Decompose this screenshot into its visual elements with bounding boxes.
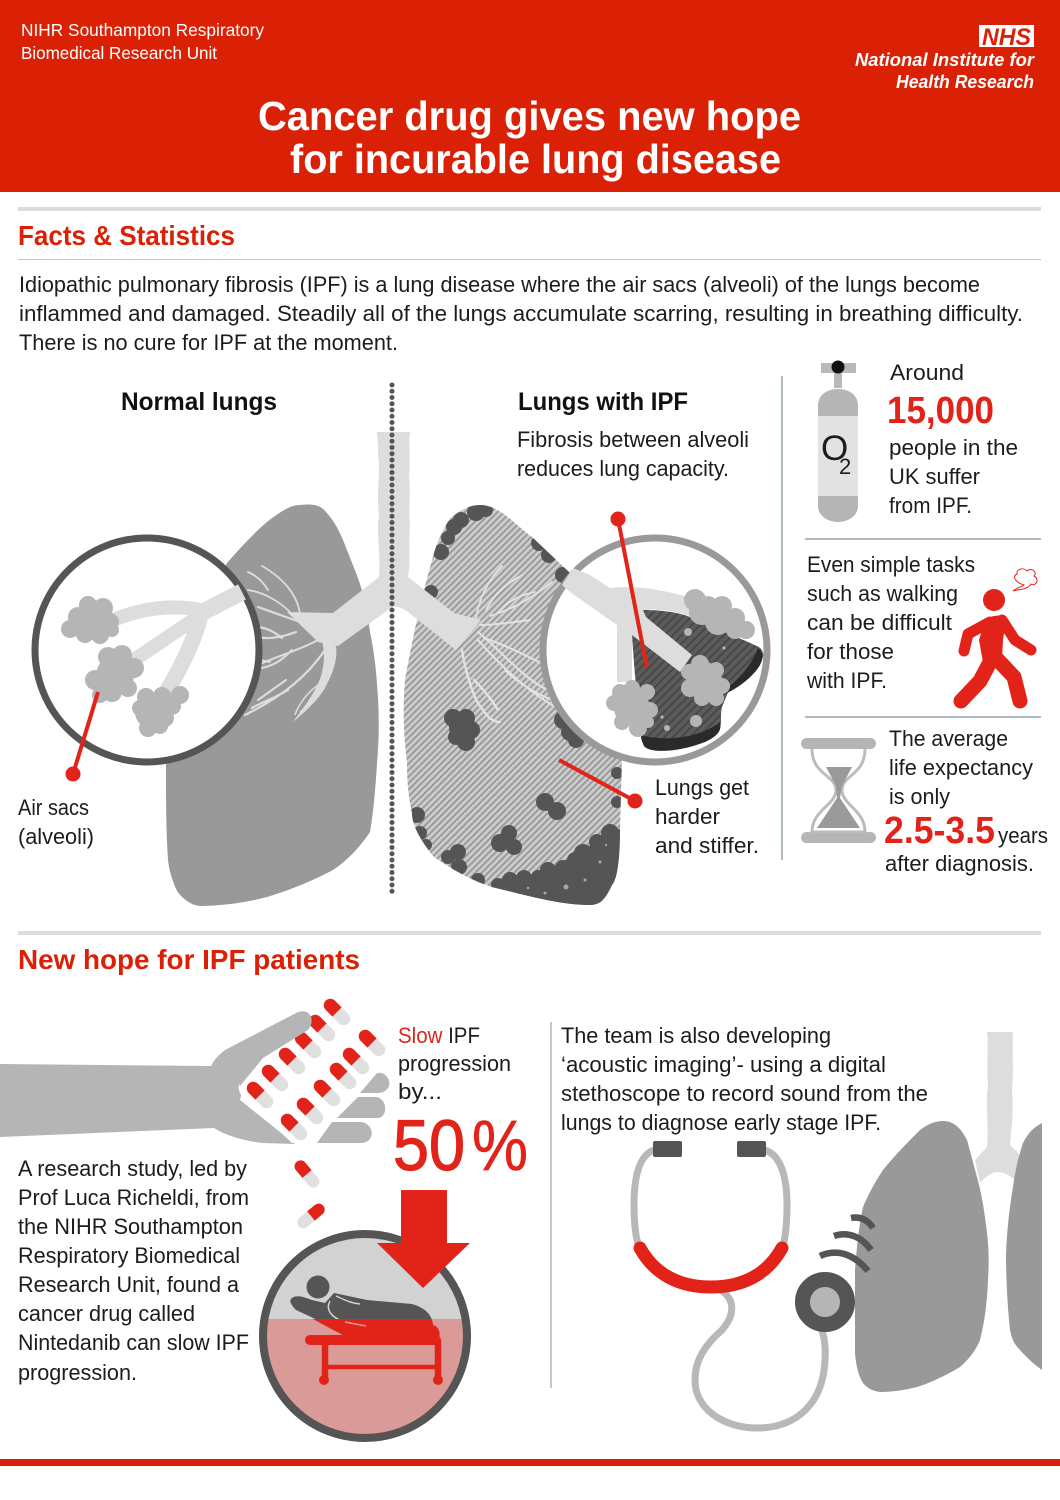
heading: facts and statistics: Facts & Statistics [18,220,235,251]
fine airways [462,566,565,722]
stat: life expectancy: years [998,823,1048,848]
stat: walking difficulty: such as walking [807,581,958,606]
intro text: Idiopathic pulmonary fibrosis (IPF) is a lung disease where the air sacs (alveoli) of the lungs become [19,272,980,297]
stat: life expectancy: is only [889,784,950,809]
intro text: inflammed and damaged. Steadily all of the lungs accumulate scarring, resulting in breathing difficulty. [19,301,1023,326]
text: research study: Respiratory Biomedical [18,1243,240,1268]
icon: oxygen tank [818,360,858,522]
NHS NIHR logo: NHS [982,24,1031,51]
scarred tissue [632,610,763,747]
illustration: stethoscope [634,1141,873,1428]
stat: life expectancy [801,726,1048,876]
diagram: lung with IPF [404,503,623,906]
unit name [21,20,264,63]
callout: stiff lungs line [559,760,642,808]
fibrosis patches [409,503,623,906]
bronchi branches [562,568,692,682]
title [258,93,801,182]
label: lungs harder: Lungs get [655,775,749,800]
label: air sacs: (alveoli) [18,824,94,849]
label: air sacs: Air sacs [18,795,89,820]
label: lungs harder: harder [655,804,720,829]
stat: slow progression [393,1023,528,1186]
stat: 15,000 people: Around [890,360,964,385]
air sac cluster [606,589,755,737]
thumb [225,1011,312,1086]
illustration: patient in bed [260,1190,470,1439]
unit name: Biomedical Research Unit [21,43,217,63]
stat: walking difficulty: Even simple tasks [807,552,975,577]
callout line [610,512,647,668]
icon: oxygen tank: O [821,429,848,468]
title: for incurable lung disease [290,136,781,182]
stat: walking difficulty: for those [807,639,894,664]
pills [244,996,388,1143]
text: research study: Research Unit, found a [18,1272,240,1297]
label: lungs harder [655,775,759,858]
stat: slow progression: % [472,1107,528,1186]
divider: dotted line [390,385,394,897]
stat: 15,000 people [818,360,1018,522]
stat: walking difficulty [806,552,1037,701]
icon: breathless walker [961,569,1037,701]
illustration: hand with blister pack [0,996,389,1231]
hand [0,1050,295,1144]
patient below fluid line [313,1319,440,1336]
text: acoustic imaging [561,1023,928,1135]
intro text: There is no cure for IPF at the moment. [19,330,398,355]
text: fibrosis description: reduces lung capacity. [517,456,729,481]
text: acoustic imaging: stethoscope to record sound from the [561,1081,928,1106]
icon: oxygen tank: 2 [839,454,851,479]
scar specks [527,844,607,894]
label: lungs harder: and stiffer. [655,833,759,858]
unit name: NIHR Southampton Respiratory [21,20,264,40]
text: research study: Nintedanib can slow IPF [18,1330,249,1355]
stat: slow progression: by... [398,1079,442,1104]
magnifier: normal air sacs [35,538,259,782]
stat: 15,000 people: 15,000 [887,390,994,432]
text: research study: A research study, led by [18,1156,247,1181]
stat: walking difficulty: can be difficult [807,610,952,635]
text: acoustic imaging: The team is also developing [561,1023,831,1048]
callout line [66,692,98,782]
text: acoustic imaging: ‘acoustic imaging’- using a digital [561,1052,886,1077]
stat: life expectancy: after diagnosis. [885,851,1034,876]
diagram: normal lung [166,505,379,906]
illustration: lungs for auscultation [855,1032,1042,1392]
stat: slow progression: progression [398,1051,511,1076]
stat: life expectancy: life expectancy [889,755,1033,780]
bronchi branches [108,592,242,702]
intro text [19,272,1023,355]
text: research study: cancer drug called [18,1301,195,1326]
header banner [0,0,1060,192]
stat: life expectancy: The average [889,726,1008,751]
NHS NIHR logo: National Institute for [855,50,1035,70]
title: Cancer drug gives new hope [258,93,801,139]
NHS NIHR logo [855,24,1035,92]
text: fibrosis description [517,427,749,481]
stat: 15,000 people: from IPF. [889,493,972,518]
sound waves [820,1217,873,1271]
fine airways [245,566,325,715]
arrow: downward [377,1190,470,1288]
label: air sacs [18,795,94,849]
stat: 15,000 people: UK suffer [889,464,980,489]
icon: hourglass [801,738,876,843]
stat: slow progression: 50 [393,1107,465,1186]
text: research study: progression. [18,1360,137,1385]
heading: lungs with IPF: Lungs with IPF [518,388,688,416]
magnifier: fibrotic alveoli [543,512,767,762]
NHS NIHR logo: Health Research [896,72,1034,92]
falling pills [292,1158,327,1231]
blister pack [239,1015,378,1143]
stat: walking difficulty: with IPF. [806,668,887,693]
text: research study: Prof Luca Richeldi, from [18,1185,249,1210]
heading: new hope: New hope for IPF patients [18,944,360,975]
stat: slow progression: Slow IPF [398,1023,480,1048]
stat: life expectancy: 2.5-3.5 [884,810,995,852]
text: fibrosis description: Fibrosis between alveoli [517,427,749,452]
text: research study: the NIHR Southampton [18,1214,243,1239]
text: acoustic imaging: lungs to diagnose early stage IPF. [561,1110,881,1135]
heading: normal lungs: Normal lungs [121,388,277,416]
patient above fluid line [290,1276,432,1319]
air sac cluster [61,596,189,737]
stat: 15,000 people: people in the [889,435,1018,460]
text: research study [18,1156,249,1385]
trachea and bronchi [287,432,481,650]
bed frame [310,1340,442,1384]
